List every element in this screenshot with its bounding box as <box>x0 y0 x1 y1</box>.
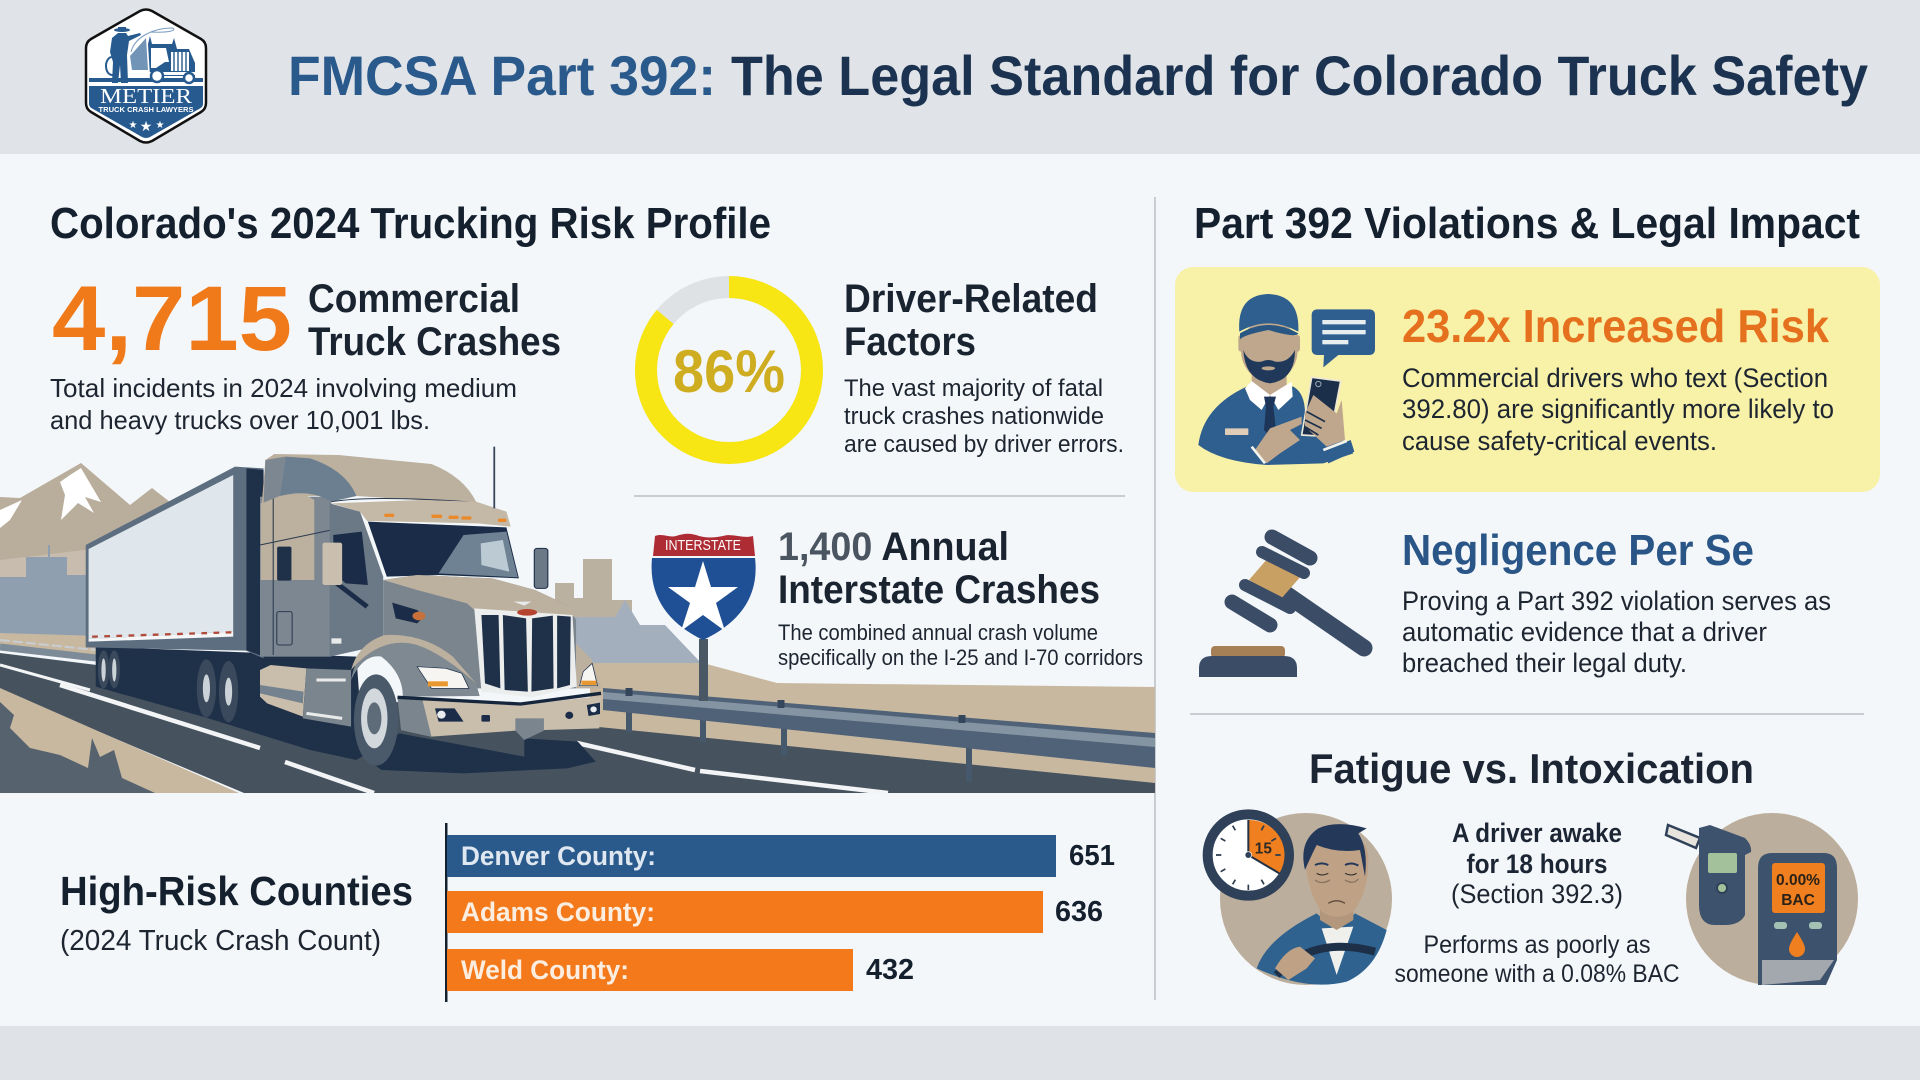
logo: Metier Truck Crash Lawyers: ★ <box>129 120 138 131</box>
bumper <box>397 693 601 740</box>
panel: 23.2x increased risk: 392.80) are significantly more likely to <box>1402 394 1834 424</box>
antenna <box>492 447 497 508</box>
right skyline and ground <box>0 559 1155 793</box>
grille <box>474 602 597 697</box>
stat: commercial truck crashes: Total incidents in 2024 involving medium <box>50 373 517 403</box>
trailer <box>86 467 264 658</box>
text: awake 18 hours comparison <box>1394 818 1680 988</box>
heading: high-risk counties <box>60 868 413 957</box>
front wheel and fender <box>351 635 601 766</box>
panel: negligence per se: automatic evidence that a driver <box>1402 617 1767 647</box>
icon: breathalyzer <box>1666 813 1858 985</box>
logo: Metier Truck Crash Lawyers <box>86 10 206 142</box>
icon: breathalyzer: BAC <box>1781 892 1815 909</box>
stat: annual interstate crashes <box>778 525 1143 670</box>
panel: negligence per se: Negligence Per Se <box>1402 526 1754 575</box>
sleeper cab <box>260 454 476 657</box>
stat: commercial truck crashes: and heavy trucks over 10,001 lbs. <box>50 405 430 435</box>
heading: high-risk counties: High-Risk Counties <box>60 868 413 914</box>
stat: annual interstate crashes: Interstate Crashes <box>778 568 1100 612</box>
bar: Denver County <box>447 835 1115 877</box>
logo: Metier Truck Crash Lawyers: ★ <box>156 120 165 131</box>
footer band <box>0 1026 1920 1080</box>
logo: Metier Truck Crash Lawyers: ★ <box>140 118 152 134</box>
header band <box>0 0 1920 154</box>
bar: Weld County: Weld County: <box>461 955 629 985</box>
bar: Denver County: 651 <box>1069 840 1115 872</box>
truck <box>86 447 601 773</box>
panel: negligence per se: Proving a Part 392 violation serves as <box>1402 586 1831 616</box>
stat: commercial truck crashes <box>50 268 561 435</box>
icon: interstate shield <box>652 534 756 640</box>
icon: tired driver with clock: 15 <box>1255 840 1272 857</box>
panel: 23.2x increased risk: 23.2x Increased Risk <box>1402 300 1829 352</box>
stat: driver-related factors: truck crashes nationwide <box>844 403 1104 430</box>
stat: driver-related factors: The vast majority of fatal <box>844 375 1103 402</box>
stat: annual interstate crashes: The combined annual crash volume <box>778 620 1098 645</box>
logo: Metier Truck Crash Lawyers: METIER <box>100 84 192 108</box>
center divider <box>1154 197 1156 1000</box>
donut chart: 86% driver-related <box>646 287 812 453</box>
fuel tank <box>260 665 351 727</box>
stat: annual interstate crashes: 1,400 Annual <box>778 525 1009 569</box>
illustration: truck on Colorado highway <box>0 447 1155 793</box>
bar: Weld County <box>447 949 914 991</box>
cowboy figure <box>106 27 174 83</box>
bar: Denver County: Denver County: <box>461 841 656 871</box>
title: FMCSA Part 392: <box>288 44 716 107</box>
bar: Weld County: 432 <box>866 954 914 986</box>
heading: fatigue vs intoxication: Fatigue vs. Intoxication <box>1309 745 1754 792</box>
panel: negligence per se <box>1199 526 1831 678</box>
icon: driver texting <box>1198 294 1375 465</box>
stat: driver-related factors <box>844 277 1124 458</box>
text: awake 18 hours comparison: for 18 hours <box>1466 849 1608 879</box>
bar chart: county crash counts <box>445 823 1115 1002</box>
panel: 23.2x increased risk <box>1175 267 1880 492</box>
logo: Metier Truck Crash Lawyers: TRUCK CRASH LAWYERS <box>98 105 194 114</box>
panel: 23.2x increased risk: cause safety-critical events. <box>1402 426 1717 456</box>
bar: Adams County: 636 <box>1055 896 1103 928</box>
stat: commercial truck crashes: 4,715 <box>52 268 292 370</box>
stat: driver-related factors: Driver-Related <box>844 277 1098 321</box>
bar: Adams County: Adams County: <box>461 897 655 927</box>
guardrail <box>603 688 1155 782</box>
title <box>288 44 1868 107</box>
stat: driver-related factors: are caused by driver errors. <box>844 431 1124 458</box>
road shadow <box>96 647 596 773</box>
stat: annual interstate crashes: specifically on the I-25 and I-70 corridors <box>778 645 1143 670</box>
text: awake 18 hours comparison: someone with a 0.08% BAC <box>1394 960 1680 988</box>
left mountains <box>0 463 210 640</box>
icon: breathalyzer: 0.00% <box>1776 872 1820 889</box>
title: The Legal Standard for Colorado Truck Safety <box>731 44 1868 107</box>
hood <box>371 575 576 688</box>
highway pole <box>699 639 708 701</box>
icon: gavel <box>1199 537 1364 677</box>
bar: Adams County <box>447 891 1103 933</box>
donut chart: 86% driver-related: 86% <box>673 338 785 405</box>
stat: commercial truck crashes: Commercial <box>308 277 520 321</box>
heading: high-risk counties: (2024 Truck Crash Count) <box>60 925 381 957</box>
panel: fatigue vs intoxication <box>1208 745 1858 988</box>
truck emblem <box>130 36 196 83</box>
panel: negligence per se: breached their legal duty. <box>1402 648 1687 678</box>
text: awake 18 hours comparison: A driver awake <box>1452 818 1622 848</box>
stat: commercial truck crashes: Truck Crashes <box>308 320 561 364</box>
icon: interstate shield: INTERSTATE <box>665 537 741 554</box>
panel: 23.2x increased risk: Commercial drivers who text (Section <box>1402 363 1828 393</box>
road <box>0 640 1155 793</box>
icon: tired driver with clock <box>1208 813 1392 985</box>
rear wheels <box>98 650 238 722</box>
heading: risk profile: Colorado's 2024 Trucking Risk Profile <box>50 199 771 248</box>
text: awake 18 hours comparison: Performs as poorly as <box>1424 931 1650 959</box>
text: awake 18 hours comparison: (Section 392.3) <box>1451 879 1623 909</box>
door, visor and windshield <box>322 500 548 657</box>
stat: driver-related factors: Factors <box>844 320 976 364</box>
heading: violations and legal impact: Part 392 Violations & Legal Impact <box>1194 199 1860 248</box>
